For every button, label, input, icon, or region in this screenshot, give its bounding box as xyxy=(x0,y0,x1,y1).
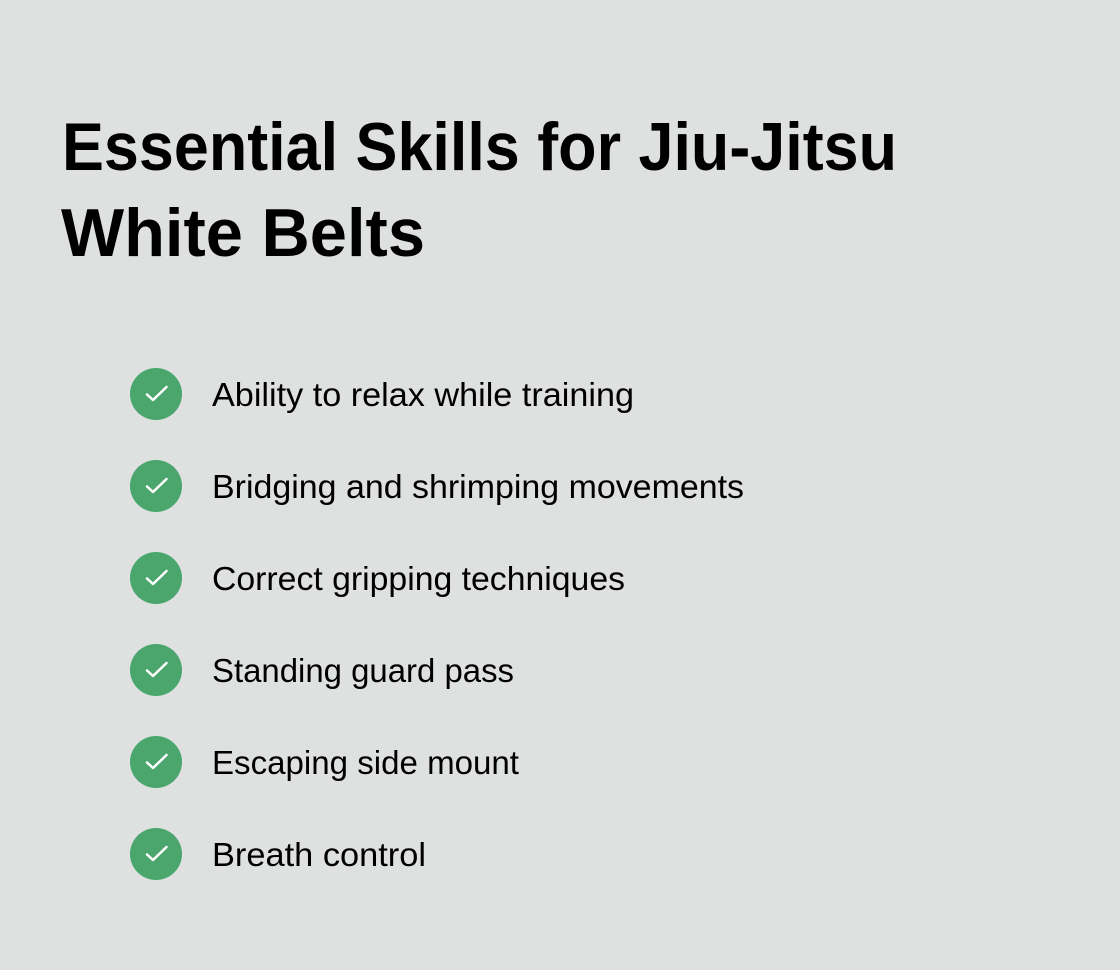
item text: Standing guard pass xyxy=(212,652,514,689)
list item: Correct gripping techniques xyxy=(130,552,625,604)
item text: Escaping side mount xyxy=(212,744,519,781)
list item: Standing guard pass xyxy=(130,644,514,696)
item text: Bridging and shrimping movements xyxy=(212,468,744,505)
icon: green check xyxy=(130,460,182,512)
icon: green check xyxy=(130,644,182,696)
title xyxy=(61,109,897,271)
item text: Ability to relax while training xyxy=(212,376,634,413)
icon: green check xyxy=(130,828,182,880)
item text: Breath control xyxy=(212,836,426,873)
icon: green check xyxy=(130,552,182,604)
list item: Escaping side mount xyxy=(130,736,519,788)
list item: Bridging and shrimping movements xyxy=(130,460,744,512)
list item: Breath control xyxy=(130,828,426,880)
icon: green check xyxy=(130,368,182,420)
title: Essential Skills for Jiu-Jitsu xyxy=(62,109,897,185)
title: White Belts xyxy=(61,195,425,271)
list item: Ability to relax while training xyxy=(130,368,634,420)
icon: green check xyxy=(130,736,182,788)
checklist xyxy=(130,368,744,880)
item text: Correct gripping techniques xyxy=(212,560,625,597)
